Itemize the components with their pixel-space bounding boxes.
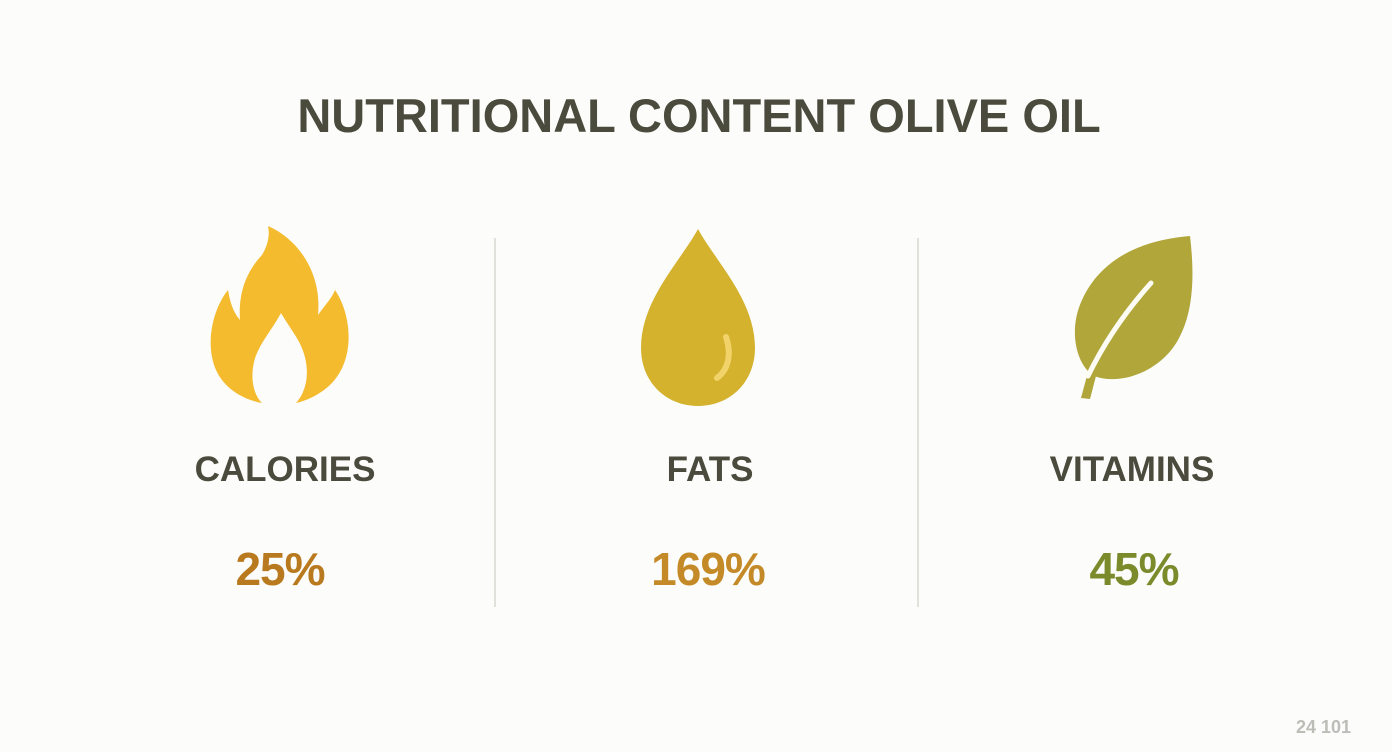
icon: flame: [211, 226, 349, 403]
icon: oil drop: [641, 229, 755, 406]
title: NUTRITIONAL CONTENT OLIVE OIL: [297, 89, 1101, 142]
footer number: 24 101: [1296, 717, 1351, 737]
icon: leaf: [1075, 236, 1192, 399]
label: calories: CALORIES: [195, 450, 375, 489]
value: calories: 25%: [235, 543, 325, 595]
value: fats: 169%: [651, 543, 765, 595]
value: vitamins: 45%: [1089, 543, 1179, 595]
label: fats: FATS: [667, 450, 753, 489]
label: vitamins: VITAMINS: [1050, 450, 1214, 489]
